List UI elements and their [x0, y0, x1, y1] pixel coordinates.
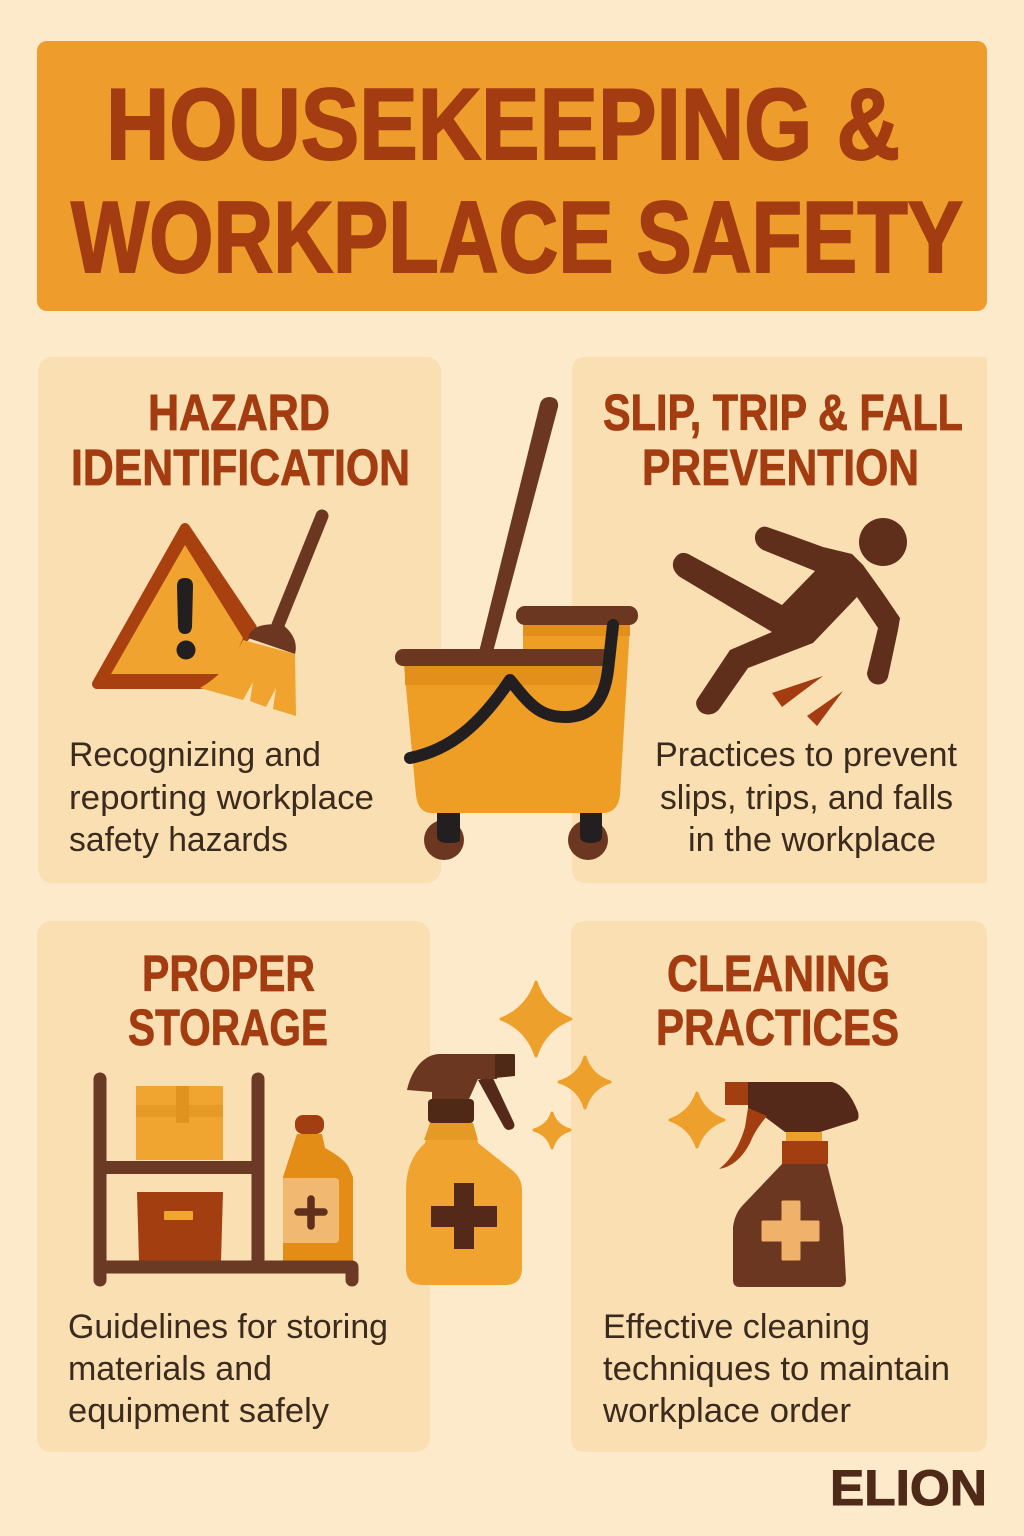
text: storage description: equipment safely [68, 1392, 329, 1430]
panel: slip, trip and fall prevention [572, 357, 987, 883]
text: cleaning description [602, 1308, 950, 1430]
panel: hazard identification [38, 357, 441, 883]
heading: cleaning practices: CLEANING [667, 945, 890, 1002]
text: slip description: in the workplace [688, 821, 936, 859]
title: HOUSEKEEPING & [106, 69, 900, 181]
title [71, 69, 963, 294]
icon: orange spray bottle [406, 1054, 522, 1285]
icon: dark spray bottle with sparkle [670, 1082, 859, 1287]
icon: falling person [673, 518, 907, 726]
text: hazard description: safety hazards [69, 821, 288, 859]
heading: proper storage [128, 945, 328, 1056]
heading: cleaning practices [656, 945, 899, 1056]
heading: proper storage: PROPER [142, 945, 315, 1002]
text: slip description [655, 736, 958, 859]
text: cleaning description: techniques to maintain [603, 1350, 950, 1388]
heading: slip, trip and fall: PREVENTION [642, 439, 919, 496]
heading: hazard identification: HAZARD [148, 384, 330, 441]
text: hazard description: Recognizing and [69, 736, 321, 774]
text: cleaning description: workplace order [602, 1392, 851, 1430]
icon: sparkles [501, 982, 610, 1148]
icon: mop bucket [395, 397, 638, 860]
heading: hazard identification [71, 384, 410, 496]
heading: hazard identification: IDENTIFICATION [71, 439, 410, 496]
title banner [37, 41, 987, 311]
text: storage description [68, 1308, 388, 1430]
text: cleaning description: Effective cleaning [603, 1308, 870, 1346]
text: hazard description [69, 736, 374, 859]
text: storage description: materials and [68, 1350, 272, 1388]
panel: proper storage [37, 921, 430, 1452]
heading: proper storage: STORAGE [128, 999, 328, 1056]
text: storage description: Guidelines for storing [68, 1308, 388, 1346]
text: slip description: slips, trips, and falls [660, 779, 953, 817]
icon: warning triangle with broom [97, 516, 322, 716]
heading: cleaning practices: PRACTICES [656, 999, 899, 1056]
text: slip description: Practices to prevent [655, 736, 958, 774]
logo: ELION: ELION [830, 1460, 987, 1516]
icon: storage shelf with boxes and bottle [100, 1079, 353, 1280]
heading: slip, trip and fall [603, 384, 963, 496]
panel: cleaning practices [571, 921, 987, 1452]
text: hazard description: reporting workplace [69, 779, 374, 817]
